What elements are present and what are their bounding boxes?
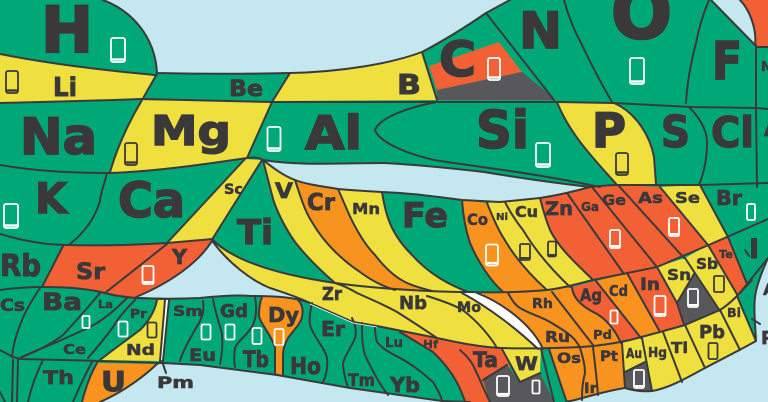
symbol Eu: Eu [189,346,216,366]
symbol Au: Au [626,347,642,362]
icon: phone on Dy [274,329,284,345]
symbol Nd: Nd [126,341,155,359]
icon: phone on Tb [252,328,262,344]
symbol Bi: Bi [727,306,741,320]
cell: Li yellow [0,54,155,103]
symbol Cr: Cr [307,190,336,216]
symbol Hg: Hg [648,346,667,361]
symbol Zn: Zn [545,198,573,220]
icon: phone on Au [634,370,644,388]
icon: phone on Pr [118,322,128,336]
symbol In: In [640,275,660,295]
symbol Cl: Cl [711,108,754,157]
symbol Ta: Ta [473,348,498,372]
icon: phone on Mg [125,143,137,165]
cell: Sn dark [677,274,720,325]
symbol Ir: Ir [584,381,597,397]
symbol Sn: Sn [667,266,691,284]
symbol Se: Se [675,189,700,207]
cell: Se yellow [660,185,728,245]
symbol Al: Al [305,106,362,160]
thin white line under Zr band [310,304,377,327]
symbol W: W [515,353,538,375]
symbol Er: Er [321,317,345,341]
cell: Sr red [42,244,167,293]
symbol Co: Co [467,210,488,229]
symbol Zr: Zr [322,284,342,305]
cell: Sb yellow [685,245,737,311]
icon: phone on Sb [714,276,724,292]
cell: C dark band [437,72,556,100]
icon: phone on Y [142,266,154,284]
cell: Y red [105,239,213,297]
cell: Rh Ru Pd orange [477,281,641,348]
symbol Th: Th [43,367,74,389]
symbol Sc: Sc [224,182,243,198]
icon: phone on As [669,218,679,236]
icon: phone on P [616,153,628,175]
icon: phone on C [488,58,500,80]
symbol Ni: Ni [496,212,508,223]
symbol Ge: Ge [602,193,626,209]
cell: Au dark [625,362,652,391]
icon: phone on Pb [708,343,718,359]
icon: phone on La [82,316,90,328]
symbol Fe: Fe [402,196,448,236]
symbol Ho: Ho [290,354,321,380]
symbol Sm: Sm [173,304,203,320]
symbol Be: Be [229,77,263,102]
cell: Sc yellow [167,159,262,243]
symbol Tl: Tl [671,339,688,357]
cell: Mg yellow [110,100,272,172]
icon: phone on Si [536,143,550,167]
cell: Ag red [572,281,641,343]
cell: Cr orange [295,180,432,291]
symbol Ag: Ag [580,286,602,306]
icon: phone on Br [747,204,755,220]
symbol Ba: Ba [42,288,82,316]
symbol Pt: Pt [600,349,618,365]
cell: W yellow [502,349,541,382]
cell: Cd orange [596,273,660,338]
symbol Ga: Ga [581,200,599,214]
icon: phone on Eu [202,324,210,340]
cell: Te red [708,237,747,296]
symbol Os: Os [557,351,581,367]
cell: In red [627,267,684,332]
cell: Ta W dark [483,365,554,402]
icon: phone on Li [6,71,18,93]
cell: Sn yellow [657,258,694,303]
symbol Cs: Cs [0,296,25,316]
cell: top-right red [740,0,768,47]
icon: phone on Ta [497,376,509,396]
symbol N: N [519,2,562,60]
icon: phone on In [654,296,666,316]
cell: P yellow [557,102,656,185]
cell: Nd yellow [100,300,165,361]
symbol Cd: Cd [609,282,628,300]
icon: phone on Al [268,127,280,151]
cell: Hg Tl Pb Bi yellow [641,296,756,391]
symbol Mg: Mg [151,107,231,155]
icon: phone on Sn [688,289,698,307]
symbol Gd: Gd [220,301,248,322]
symbol U: U [101,365,126,398]
cell: B yellow [272,52,437,101]
cell: C red band [429,42,522,90]
icon: phone on K [4,204,18,228]
symbol K: K [35,174,68,223]
cell: Dy orange [259,297,303,375]
cell: Co orange [462,200,547,292]
cell: V yellow [263,160,395,290]
cell: Au yellow [622,338,647,372]
symbol Mn: Mn [352,200,380,218]
icon: phone on H [111,38,125,62]
symbol B: B [397,68,421,101]
cell: Ni and Cu yellow [487,198,593,290]
symbol Nb: Nb [399,293,427,314]
symbol Rh: Rh [532,297,553,312]
symbol Pb: Pb [699,322,725,343]
symbol Tb: Tb [243,348,269,373]
symbol La: La [98,298,113,311]
symbol Te: Te [719,248,733,261]
symbol Si: Si [476,101,529,161]
symbol Br: Br [716,186,742,210]
symbol Sb: Sb [696,255,718,273]
symbol Pd: Pd [593,328,612,342]
symbol Mo: Mo [457,300,481,316]
symbol Pm: Pm [157,373,194,392]
cell: Hf Ta red [377,326,510,402]
symbol Pr: Pr [130,307,147,321]
symbol C: C [439,32,476,88]
symbol Sr: Sr [76,260,105,285]
symbol Na: Na [20,108,97,166]
symbol Rb: Rb [0,249,41,284]
symbol Tm: Tm [348,371,375,391]
icon: phone on O [630,58,644,84]
icon: phone on Nd [148,322,156,338]
symbol Ca: Ca [118,173,185,229]
symbol V: V [275,179,294,203]
symbol I: I [749,234,759,265]
symbol Y: Y [171,245,188,269]
icon: phone on Gd [226,324,234,340]
symbol Ru: Ru [545,328,570,346]
symbol Hf: Hf [423,338,438,351]
symbol Li: Li [53,73,77,103]
symbol As: As [638,189,663,207]
symbol F: F [712,32,742,92]
cell: Os Ir Pt orange [549,343,625,400]
symbol S: S [661,107,690,158]
cell: Zn Ga Ge As red [540,185,708,280]
icon: phone on Cd [610,310,618,324]
icon: phone on Co [486,244,498,266]
cell: Zr Nb Mo yellow band [213,242,538,349]
symbol Ce: Ce [63,343,86,358]
symbol P: P [592,104,626,159]
cell: Pm white strip [160,300,169,361]
symbol Lu: Lu [385,336,403,351]
icon: phone on W [532,380,540,394]
symbol Cu: Cu [515,203,538,221]
icon: phone on Ni [520,244,530,260]
symbol Dy: Dy [268,303,299,327]
symbol Yb: Yb [389,373,420,397]
icon: phone on Ga [610,230,620,248]
symbol Ti: Ti [237,213,273,253]
cell: white wedge [462,293,543,349]
cell: U orange [82,363,157,402]
icon: phone on Cu [548,242,556,256]
cell: Mn yellow [338,189,468,292]
